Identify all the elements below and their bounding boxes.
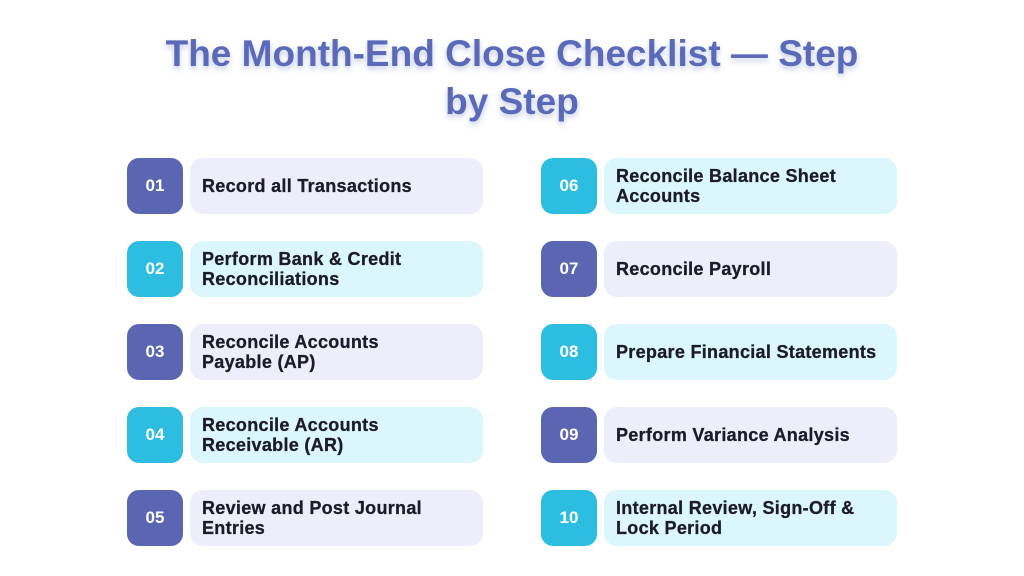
step 02: Perform Bank & Credit — [202, 249, 401, 269]
step 06: Accounts — [616, 186, 700, 206]
step 08: Prepare Financial Statements — [616, 342, 876, 362]
step 05: Review and Post Journal — [202, 498, 422, 518]
step 01: 01 — [146, 176, 164, 195]
step 05: Entries — [202, 518, 265, 538]
step 04: Receivable (AR) — [202, 435, 344, 455]
step 03: Payable (AP) — [202, 352, 316, 372]
step 10 — [541, 490, 897, 546]
step 06 — [541, 158, 897, 214]
step 05 — [127, 490, 483, 546]
step 08: 08 — [560, 342, 578, 361]
step 04: Reconcile Accounts — [202, 415, 379, 435]
step 10: 10 — [560, 508, 578, 527]
title — [164, 33, 860, 127]
step 07: Reconcile Payroll — [616, 259, 771, 279]
title: by Step — [445, 81, 579, 122]
step 04 — [127, 407, 483, 463]
step 09 — [541, 407, 897, 463]
step 03: 03 — [146, 342, 164, 361]
step 03: Reconcile Accounts — [202, 332, 379, 352]
step 10: Internal Review, Sign-Off & — [616, 498, 854, 518]
step 09: Perform Variance Analysis — [616, 425, 850, 445]
step 09: 09 — [560, 425, 578, 444]
step 06: 06 — [560, 176, 578, 195]
step 02: 02 — [146, 259, 164, 278]
step 03 — [127, 324, 483, 380]
step 02 — [127, 241, 483, 297]
step 08 — [541, 324, 897, 380]
step 02: Reconciliations — [202, 269, 340, 289]
step 07: 07 — [560, 259, 578, 278]
step 04: 04 — [146, 425, 164, 444]
step 01 — [127, 158, 483, 214]
title: The Month-End Close Checklist — Step — [166, 33, 858, 74]
step 06: Reconcile Balance Sheet — [616, 166, 836, 186]
step 05: 05 — [146, 508, 164, 527]
step 07 — [541, 241, 897, 297]
step 10: Lock Period — [616, 518, 722, 538]
step 01: Record all Transactions — [202, 176, 412, 196]
